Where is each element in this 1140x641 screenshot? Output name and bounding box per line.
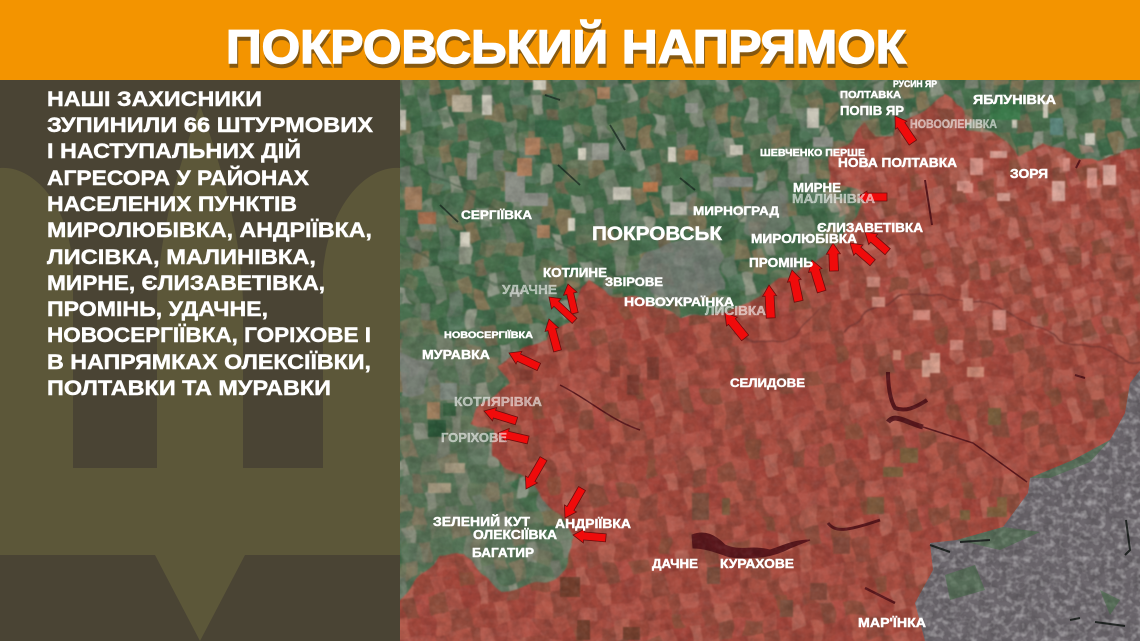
arrows: front-line advances [482, 112, 919, 545]
map place labels: КОТЛЯРІВКА [454, 395, 542, 409]
text block: summary of repelled attacks: ПРОМІНЬ, УДАЧНЕ, [47, 298, 268, 321]
title: ПОКРОВСЬКИЙ НАПРЯМОК [226, 20, 906, 73]
arrow [506, 347, 542, 373]
map place labels: ПОПІВ ЯР [840, 103, 904, 118]
arrow [860, 227, 892, 257]
map place labels: ШЕВЧЕНКО ПЕРШЕ [760, 148, 865, 159]
occupied territory overlay [380, 93, 1140, 641]
map place labels: МИРОЛЮБІВКА [751, 232, 857, 246]
map place labels: ЗОРЯ [1010, 166, 1048, 181]
icon: trident watermark [0, 105, 400, 641]
map place labels: ЗЕЛЕНИЙ КУТ [433, 514, 530, 529]
text block: summary of repelled attacks: НОВОСЕРГІЇВКА, ГОРІХОВЕ І [47, 324, 371, 347]
map base: unoccupied farmland [400, 80, 1140, 600]
text block: summary of repelled attacks: НАСЕЛЕНИХ ПУНКТІВ [47, 193, 297, 216]
dark creek lines on farmland [440, 95, 695, 222]
text block: summary of repelled attacks: І НАСТУПАЛЬНИХ ДІЙ [47, 139, 301, 163]
arrow [826, 243, 841, 271]
map place labels: НОВОУКРАЇНКА [624, 294, 734, 309]
map place labels: ПОЛТАВКА [840, 89, 901, 101]
arrow [889, 112, 919, 146]
arrow [785, 269, 806, 303]
map place labels: ЛИСІВКА [705, 304, 766, 318]
text block: summary of repelled attacks [47, 88, 373, 400]
map place labels: ПОКРОВСЬК [592, 223, 722, 245]
arrow [496, 426, 530, 447]
arrow [858, 191, 887, 203]
map place labels: ДАЧНЕ [652, 557, 698, 571]
text block: summary of repelled attacks: НАШІ ЗАХИСНИКИ [47, 88, 262, 111]
farmland fields: light, grey and tan plots [400, 80, 1095, 493]
arrow [561, 282, 582, 315]
arrow [720, 309, 751, 342]
map place labels: УДАЧНЕ [502, 283, 557, 297]
map place labels: КОТЛИНЕ [543, 266, 607, 280]
map place labels: РУСИН ЯР [893, 79, 937, 89]
map place labels: АНДРІЇВКА [555, 516, 631, 531]
arrow [572, 528, 606, 545]
map place labels: ПРОМІНЬ [749, 256, 813, 270]
map place labels [422, 79, 1057, 630]
map place labels: МАР'ЇНКА [858, 615, 926, 630]
map place labels: СЕЛИДОВЕ [730, 376, 805, 390]
text block: summary of repelled attacks: МИРНЕ, ЄЛИЗАВЕТІВКА, [47, 272, 325, 295]
map place labels: ЗВІРОВЕ [605, 275, 663, 289]
occupied-held urban area at lower right [915, 370, 1140, 641]
map place labels: МИРНОГРАД [693, 204, 779, 218]
arrow [762, 285, 778, 318]
arrow [520, 455, 550, 492]
map place labels: ЯБЛУНІВКА [973, 92, 1057, 107]
map place labels: ОЛЕКСІЇВКА [473, 527, 557, 542]
map place labels: НОВОСЕРГІЇВКА [444, 330, 533, 341]
arrow [542, 317, 564, 353]
map place labels: МАЛИНІВКА [792, 191, 876, 206]
text block: summary of repelled attacks: АГРЕСОРА У РАЙОНАХ [47, 166, 309, 190]
title: ПОКРОВСЬКИЙ НАПРЯМОК [227, 24, 907, 77]
occupied fields: pink and olive plots [520, 151, 1116, 640]
text block: summary of repelled attacks: В НАПРЯМКАХ ОЛЕКСІЇВКИ, [47, 351, 371, 374]
map place labels: МУРАВКА [422, 348, 490, 362]
arrow [559, 485, 588, 522]
text block: summary of repelled attacks: МИРОЛЮБІВКА, АНДРІЇВКА, [47, 219, 372, 242]
text block: summary of repelled attacks: ПОЛТАВКИ ТА МУРАВКИ [47, 377, 331, 400]
map place labels: ЄЛИЗАВЕТІВКА [817, 221, 923, 235]
map place labels: КУРАХОВЕ [720, 557, 794, 571]
satellite texture [400, 80, 1140, 641]
map place labels: МИРНЕ [793, 180, 841, 195]
left panel background [0, 80, 400, 641]
arrow [544, 292, 579, 326]
arrow [482, 404, 519, 428]
map place labels: НОВА ПОЛТАВКА [838, 155, 958, 170]
map place labels: НОВООЛЕНІВКА [910, 119, 997, 131]
map place labels: ГОРІХОВЕ [441, 431, 507, 445]
arrow [805, 258, 828, 294]
header band [0, 0, 1140, 80]
map place labels: БАГАТИР [472, 546, 534, 560]
text block: summary of repelled attacks: ЛИСІВКА, МАЛИНІВКА, [47, 246, 316, 269]
water: rivers and reservoirs [560, 160, 1085, 603]
map place labels: СЕРГІЇВКА [461, 207, 532, 222]
panel: satellite map [380, 60, 1140, 641]
text block: summary of repelled attacks: ЗУПИНИЛИ 66 ШТУРМОВИХ [47, 114, 373, 137]
arrow [845, 238, 877, 268]
